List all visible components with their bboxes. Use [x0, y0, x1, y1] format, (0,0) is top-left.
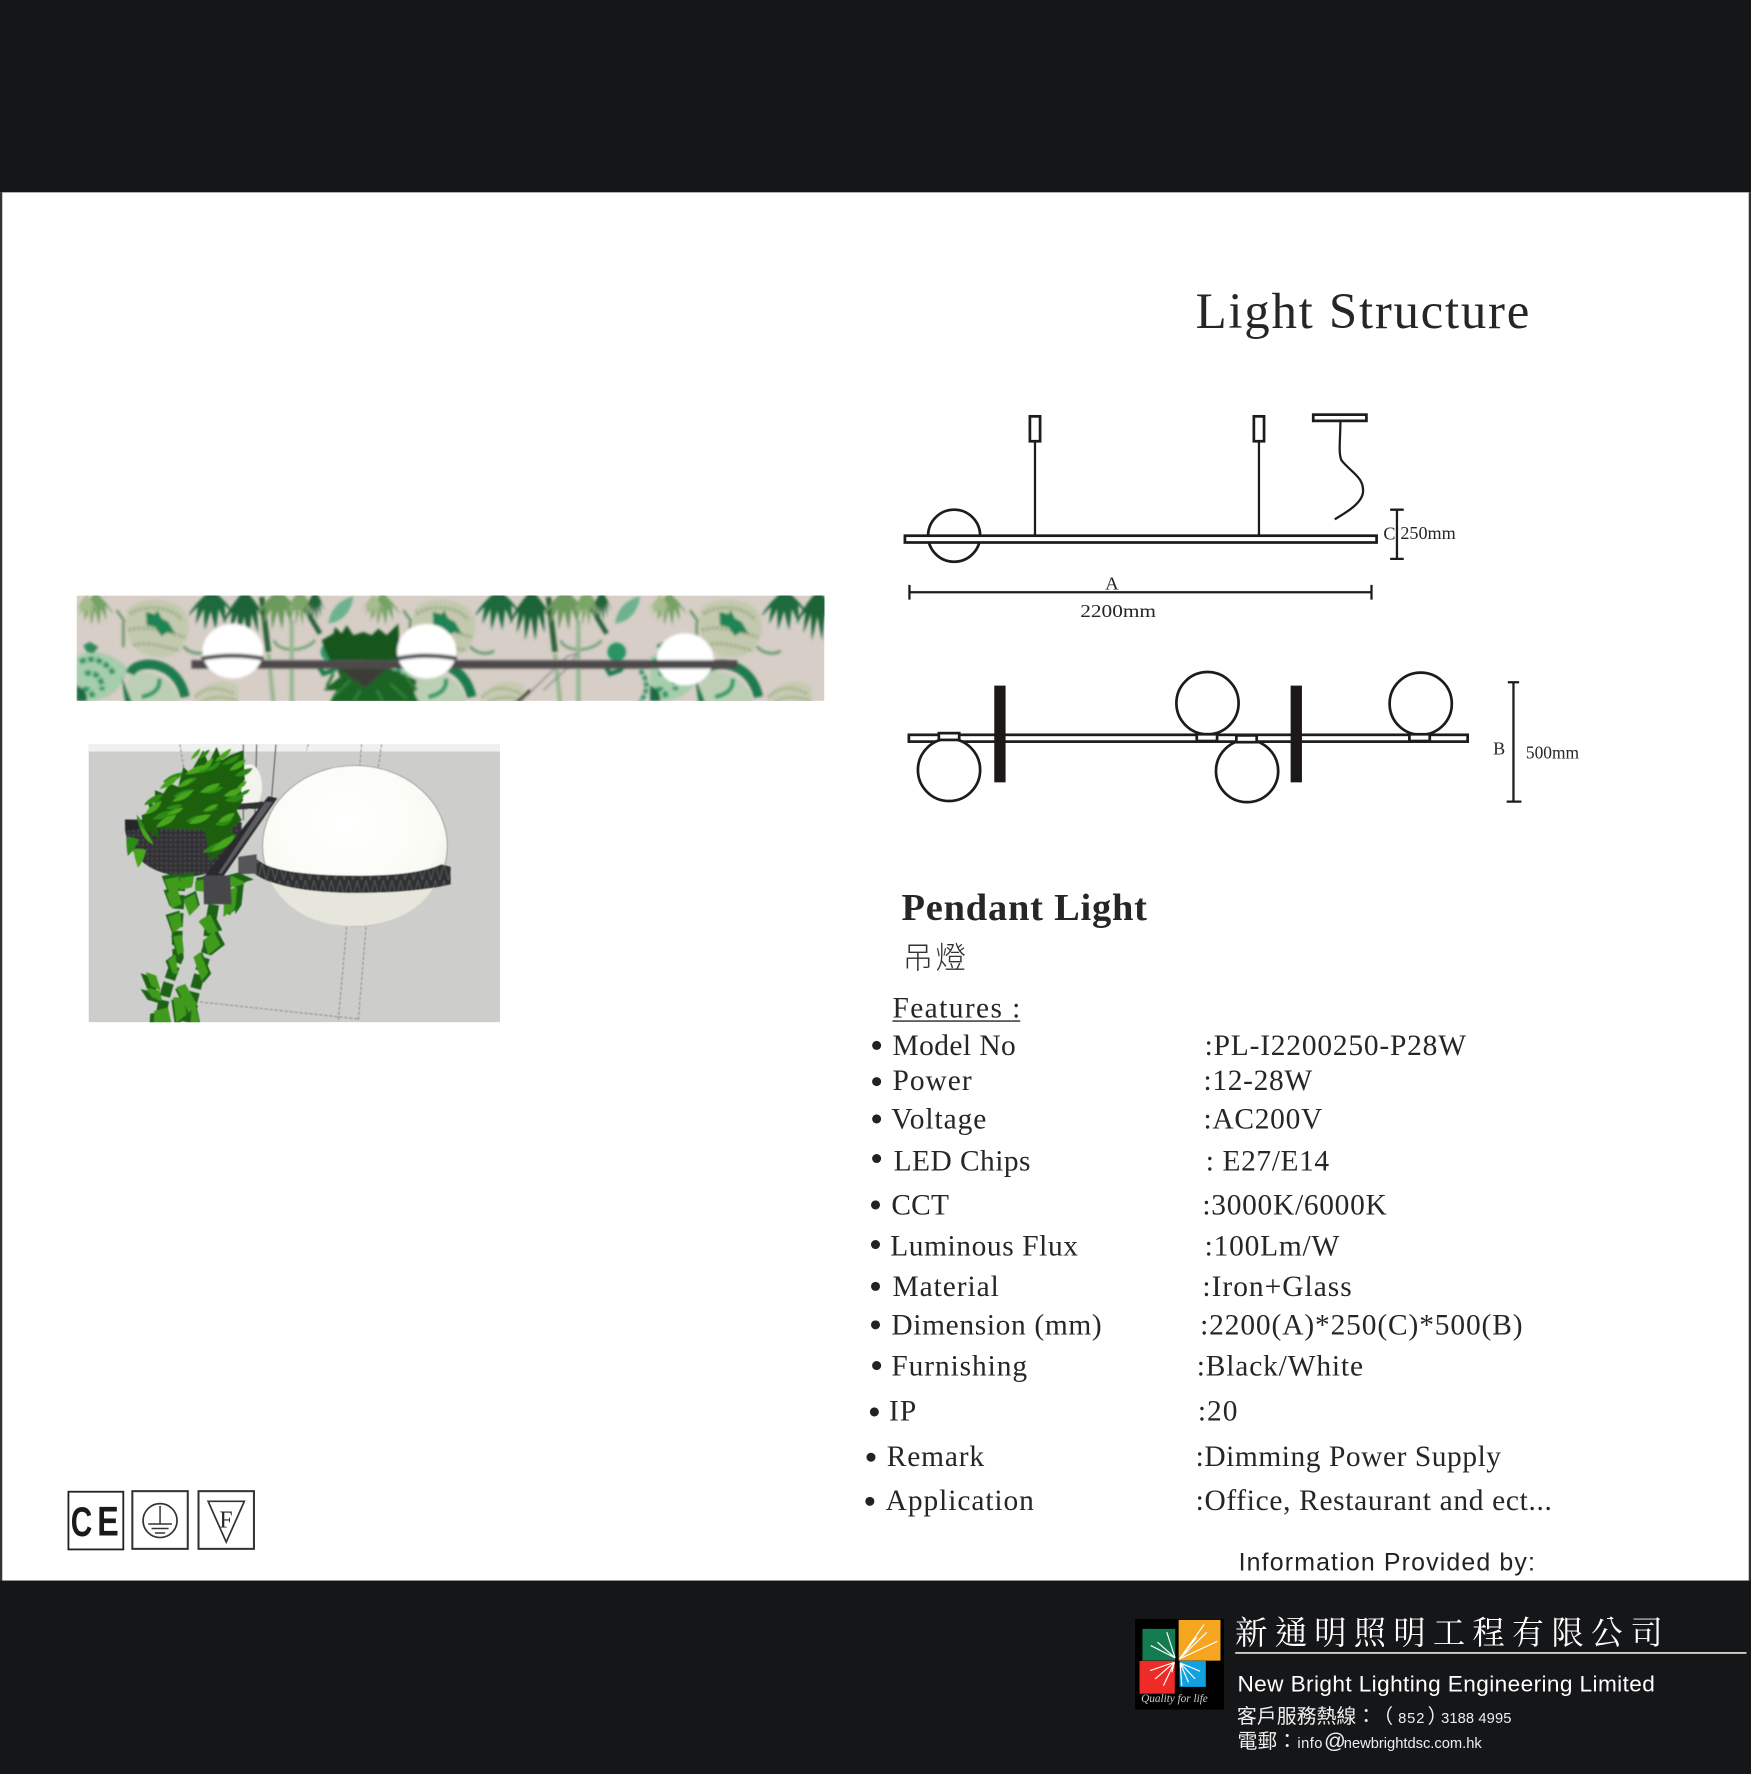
globe: [928, 510, 980, 562]
spec list: [865, 1030, 1552, 1517]
dimension C: [1390, 510, 1404, 559]
horizontal bar: [192, 660, 737, 669]
product name in Chinese: 吊燈: [903, 941, 966, 975]
ceiling canopy: [1313, 415, 1366, 421]
icon: F mark triangle: [199, 1491, 254, 1549]
footer rule: [1235, 1652, 1746, 1654]
spec labels: LED Chips: [894, 1146, 1030, 1178]
information provided by: Information Provided by:: [1239, 1548, 1535, 1576]
trailing vines: [141, 872, 254, 1027]
email: newbrightdsc.com.hk: [1344, 1736, 1482, 1752]
spec values: :Iron+Glass: [1202, 1271, 1352, 1303]
page side borders: [1, 192, 1750, 1581]
features heading: Features :: [892, 993, 1020, 1025]
bar: [909, 735, 1468, 742]
value 2200mm: 2200mm: [1080, 601, 1156, 621]
dashed wireframe: [180, 744, 382, 1020]
cross brackets: [994, 686, 1302, 782]
icon: CE mark: C: [71, 1498, 92, 1545]
spec labels: Material: [892, 1271, 999, 1303]
photo: pendant light against palm wallpaper: [76, 596, 824, 701]
spec labels: [886, 1030, 1102, 1517]
company name in Chinese: 新通明照明工程有限公司: [1235, 1615, 1663, 1651]
spec labels: Luminous Flux: [890, 1230, 1078, 1262]
customer hotline: 客戶服務熱線：: [1237, 1705, 1376, 1728]
spec values: :20: [1198, 1396, 1237, 1428]
value 500mm: 500mm: [1526, 743, 1579, 763]
spec labels: IP: [889, 1396, 916, 1428]
spec labels: Application: [886, 1485, 1034, 1517]
icon: CE mark: E: [97, 1497, 119, 1544]
company logo: Quality for life: [1141, 1693, 1208, 1705]
customer hotline: 852: [1398, 1711, 1425, 1727]
spec values: :2200(A)*250(C)*500(B): [1200, 1310, 1523, 1342]
spec labels: CCT: [891, 1190, 949, 1222]
mounting clips: [1030, 416, 1264, 441]
power cord: [1335, 421, 1363, 519]
icon: F mark triangle: F: [219, 1507, 233, 1533]
globe clips: [939, 733, 1430, 742]
icon: CE mark: [68, 1492, 123, 1549]
customer hotline: 3188 4995: [1441, 1711, 1512, 1727]
dimension B: [1507, 682, 1521, 802]
spec values: :100Lm/W: [1205, 1230, 1340, 1262]
spec labels: Furnishing: [891, 1350, 1027, 1382]
email: 電郵：: [1237, 1730, 1297, 1753]
company name in English: New Bright Lighting Engineering Limited: [1237, 1671, 1655, 1696]
icon: protective earth: [132, 1491, 188, 1549]
spec values: :3000K/6000K: [1202, 1190, 1387, 1222]
diagram: plan view with dimensions: [909, 672, 1579, 802]
spec labels: Remark: [887, 1441, 984, 1473]
spec values: :PL-I2200250-P28W: [1205, 1030, 1466, 1062]
email: info: [1297, 1736, 1323, 1752]
horizontal bar: [905, 536, 1377, 542]
spec labels: Power: [892, 1065, 972, 1097]
spec labels: Dimension (mm): [891, 1310, 1102, 1342]
top black band: [0, 0, 1751, 192]
spec values: :Black/White: [1197, 1350, 1363, 1382]
planter foliage: [126, 746, 254, 868]
label B: B: [1493, 739, 1505, 759]
spec values: : E27/E14: [1206, 1146, 1329, 1178]
globes: [202, 624, 263, 679]
certification icons: [68, 1491, 254, 1549]
dimension A: [909, 585, 1372, 600]
company logo: [1135, 1619, 1224, 1710]
product name: Pendant Light: [902, 887, 1147, 929]
spec labels: Model No: [892, 1030, 1016, 1062]
spec values: :12-28W: [1204, 1065, 1312, 1097]
suspension rods: [1035, 441, 1259, 536]
diagram: side elevation with dimensions: [905, 415, 1456, 621]
spec values: :Dimming Power Supply: [1196, 1441, 1501, 1473]
spec values: :AC200V: [1204, 1104, 1322, 1136]
bottom black band: [0, 1581, 1751, 1774]
spec values: :Office, Restaurant and ect...: [1196, 1485, 1552, 1517]
customer hotline: ）: [1427, 1706, 1447, 1728]
label C: C: [1383, 524, 1395, 544]
spec labels: Voltage: [891, 1104, 986, 1136]
label A: A: [1105, 573, 1119, 593]
photo: 3D render of globe and planter: [89, 738, 500, 1027]
bullets: [865, 1041, 881, 1506]
heading: Light Structure: Light Structure: [1196, 284, 1529, 340]
hanging plant: [322, 624, 400, 660]
value 250mm: 250mm: [1400, 523, 1456, 543]
customer hotline: （: [1373, 1706, 1393, 1728]
globes: [918, 672, 1452, 802]
light bar and bracket: [205, 796, 277, 876]
spec values: [1196, 1030, 1552, 1517]
planter bowl: [125, 820, 242, 877]
email: @: [1324, 1729, 1346, 1753]
